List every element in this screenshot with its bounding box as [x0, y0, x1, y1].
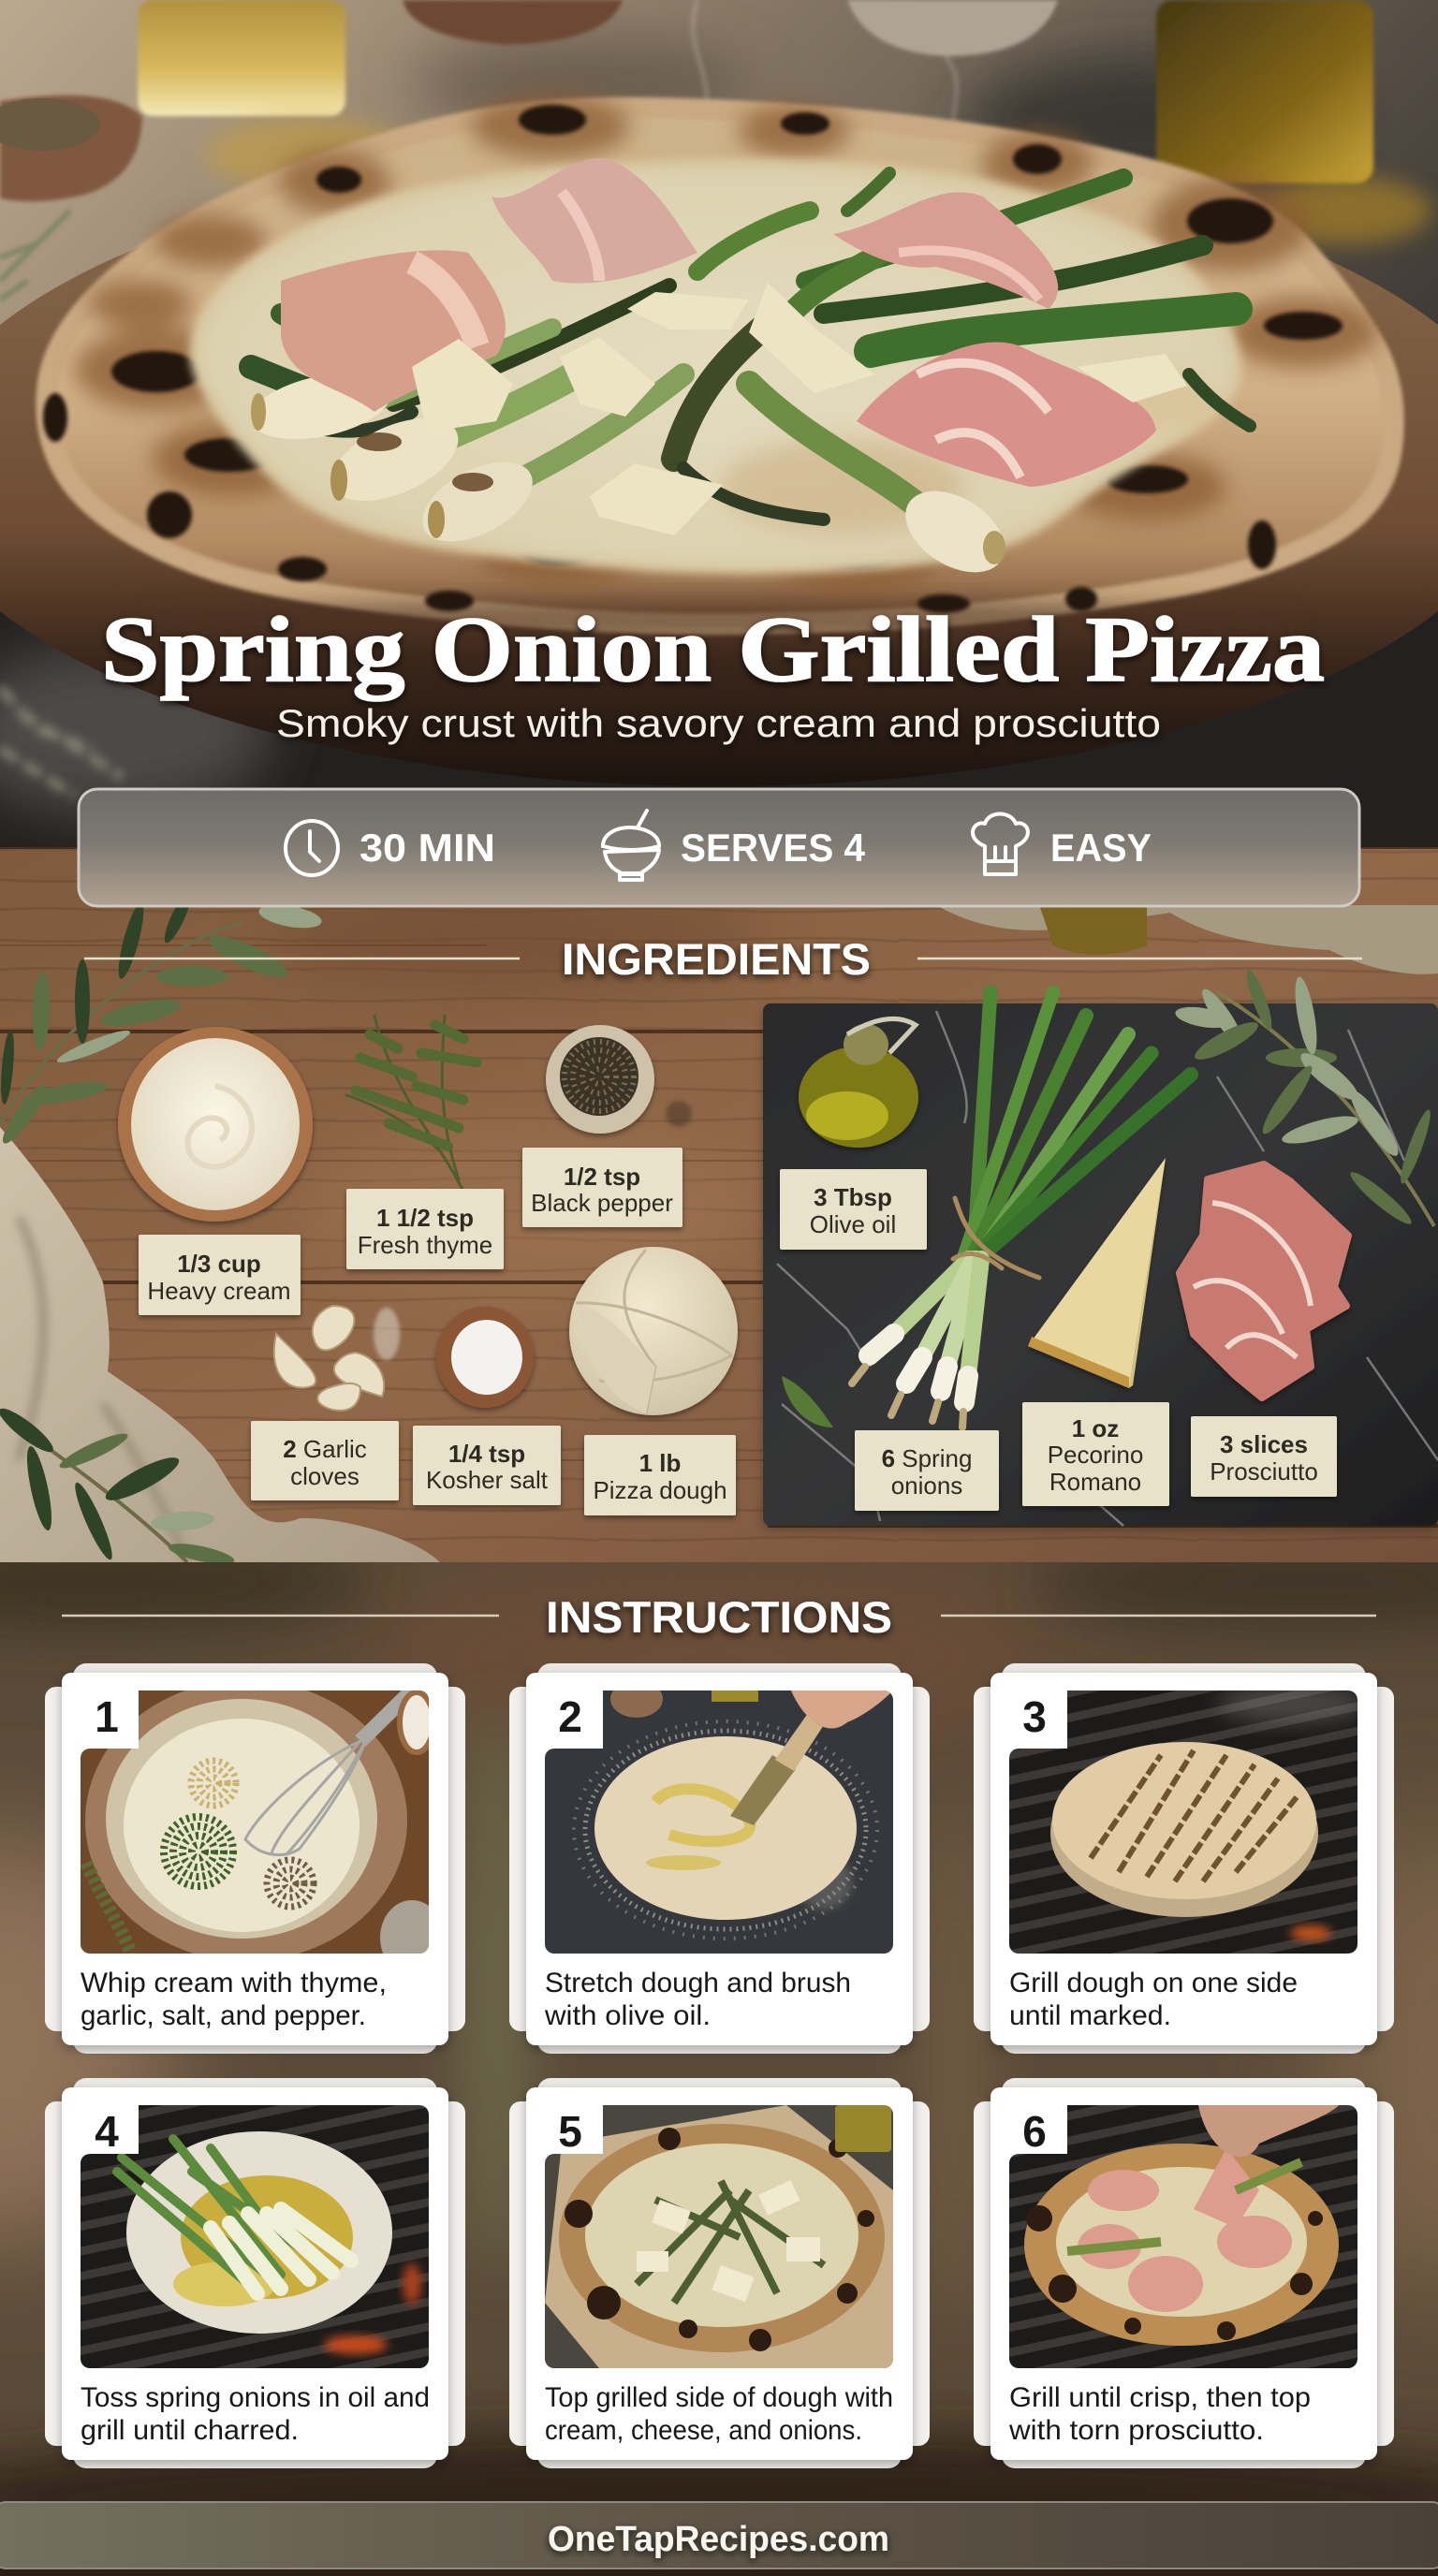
pill: recipe stats — [79, 789, 1359, 906]
cheese shavings — [412, 283, 1187, 535]
label: olive oil — [780, 1169, 927, 1250]
label: pecorino romano: 1 oz — [1072, 1414, 1119, 1442]
step 1 photo — [81, 1690, 429, 1954]
label: black pepper: Black pepper — [531, 1189, 673, 1217]
pizza char spots — [43, 105, 1343, 613]
label: kosher salt: Kosher salt — [426, 1466, 549, 1494]
label: heavy cream — [139, 1235, 301, 1315]
step 4 card — [45, 2078, 465, 2468]
pepper bowl — [546, 1025, 692, 1134]
marble board — [763, 1003, 1438, 1526]
label: prosciutto: 3 slices — [1220, 1430, 1308, 1458]
label: spring onions: onions — [891, 1471, 962, 1500]
garlic cloves — [274, 1306, 384, 1411]
label: pecorino romano: Pecorino — [1048, 1441, 1143, 1469]
label: garlic cloves: cloves — [290, 1462, 360, 1490]
step 2 text: with olive oil. — [544, 2000, 711, 2031]
cream bowl — [118, 1027, 313, 1222]
step 3 number: 3 — [1022, 1692, 1047, 1741]
crust browning — [75, 95, 1378, 591]
label: prosciutto: Prosciutto — [1210, 1457, 1318, 1486]
label: olive oil: Olive oil — [810, 1210, 896, 1238]
step 6 photo — [1009, 2105, 1357, 2368]
icon: clock — [286, 821, 338, 875]
label: garlic cloves: 2 Garlic — [283, 1435, 367, 1463]
ingredients wood background — [0, 847, 1438, 1562]
step 5 photo — [545, 2105, 893, 2368]
step 2 text: Stretch dough and brush — [545, 1968, 851, 1998]
olive oil cruet — [799, 1018, 918, 1148]
prosciutto pile — [1180, 1164, 1348, 1398]
instructions heading: INSTRUCTIONS — [546, 1592, 892, 1642]
pizza dough ball — [569, 1247, 738, 1415]
label: pizza dough — [584, 1435, 736, 1515]
step 1 text: Whip cream with thyme, — [81, 1968, 387, 1998]
step 5 text — [545, 2382, 893, 2446]
step 3 text: Grill dough on one side — [1009, 1968, 1298, 1998]
time label: 30 MIN — [360, 826, 495, 870]
step 4 text: Toss spring onions in oil and — [81, 2382, 430, 2413]
wooden board under pizza — [0, 247, 1438, 786]
step 4 number: 4 — [95, 2107, 119, 2156]
step 1 number: 1 — [95, 1692, 119, 1741]
step 1 text: garlic, salt, and pepper. — [81, 2000, 366, 2031]
label: prosciutto — [1191, 1416, 1337, 1497]
icon: olive branch on marble — [1174, 968, 1435, 1229]
step 3 text — [1009, 1968, 1298, 2031]
step 5 card — [509, 2078, 930, 2468]
pizza cheese surface — [197, 166, 1235, 567]
step 3 text: until marked. — [1009, 2000, 1171, 2031]
salt bowl — [374, 1307, 534, 1408]
step 6 text: Grill until crisp, then top — [1009, 2382, 1311, 2413]
step 6 text — [1008, 2382, 1311, 2446]
difficulty label: EASY — [1050, 826, 1152, 870]
title: Spring Onion Grilled Pizza — [101, 597, 1325, 701]
step 1 text — [81, 1968, 387, 2031]
step 4 text — [81, 2382, 430, 2446]
step 3 card — [974, 1663, 1394, 2054]
ingredients heading: INGREDIENTS — [562, 934, 871, 984]
subtitle: Smoky crust with savory cream and prosciutto — [276, 701, 1161, 745]
hero photo: grilled pizza on wooden board — [0, 0, 1438, 847]
label: kosher salt: 1/4 tsp — [448, 1440, 525, 1468]
linen cloth left — [0, 1127, 440, 1562]
label: fresh thyme — [346, 1189, 504, 1269]
grilled spring onions — [251, 173, 1250, 520]
label: pizza dough: Pizza dough — [593, 1476, 727, 1504]
step 2 photo — [545, 1680, 893, 1954]
label: kosher salt — [413, 1426, 561, 1505]
step 5 text: cream, cheese, and onions. — [545, 2415, 862, 2446]
step 4 photo — [81, 2105, 429, 2368]
label: garlic cloves — [251, 1421, 399, 1500]
label: fresh thyme: Fresh thyme — [358, 1231, 492, 1259]
icon: olive branch bottom left — [0, 1403, 236, 1568]
icon: chef hat — [973, 814, 1028, 874]
label: heavy cream: 1/3 cup — [177, 1250, 261, 1278]
footer bar — [0, 2502, 1438, 2569]
spring onion bunch — [852, 992, 1191, 1427]
step 2 number: 2 — [558, 1692, 582, 1741]
label: olive oil: 3 Tbsp — [814, 1183, 892, 1211]
icon: bowl — [603, 811, 659, 880]
label: black pepper: 1/2 tsp — [564, 1163, 640, 1191]
step 3 photo — [1009, 1685, 1367, 1954]
prosciutto slices — [281, 158, 1156, 487]
leaf on marble — [782, 1376, 833, 1427]
step 2 card — [509, 1663, 930, 2054]
label: fresh thyme: 1 1/2 tsp — [376, 1204, 474, 1232]
label: spring onions — [855, 1430, 999, 1511]
step 2 text — [544, 1968, 851, 2031]
instructions background — [0, 1535, 1438, 2576]
label: pecorino romano: Romano — [1049, 1468, 1141, 1496]
icon: olive branch top left — [0, 889, 323, 1148]
label: pecorino romano — [1022, 1402, 1169, 1506]
label: black pepper — [522, 1148, 682, 1227]
serves label: SERVES 4 — [681, 826, 866, 870]
label: spring onions: 6 Spring — [882, 1444, 972, 1472]
label: heavy cream: Heavy cream — [147, 1277, 291, 1305]
step 6 number: 6 — [1022, 2107, 1047, 2156]
step 6 text: with torn prosciutto. — [1008, 2415, 1264, 2446]
pecorino romano wedge — [1028, 1158, 1166, 1388]
step 5 text: Top grilled side of dough with — [545, 2382, 893, 2413]
step 5 number: 5 — [558, 2107, 582, 2156]
pizza crust — [46, 108, 1394, 624]
step 1 card — [45, 1663, 465, 2054]
thyme sprig — [346, 1016, 477, 1193]
step 4 text: grill until charred. — [81, 2415, 299, 2446]
step 6 card — [974, 2078, 1394, 2468]
label: pizza dough: 1 lb — [639, 1449, 681, 1477]
website: OneTapRecipes.com — [548, 2520, 889, 2559]
linen cloth top right — [936, 905, 1438, 974]
